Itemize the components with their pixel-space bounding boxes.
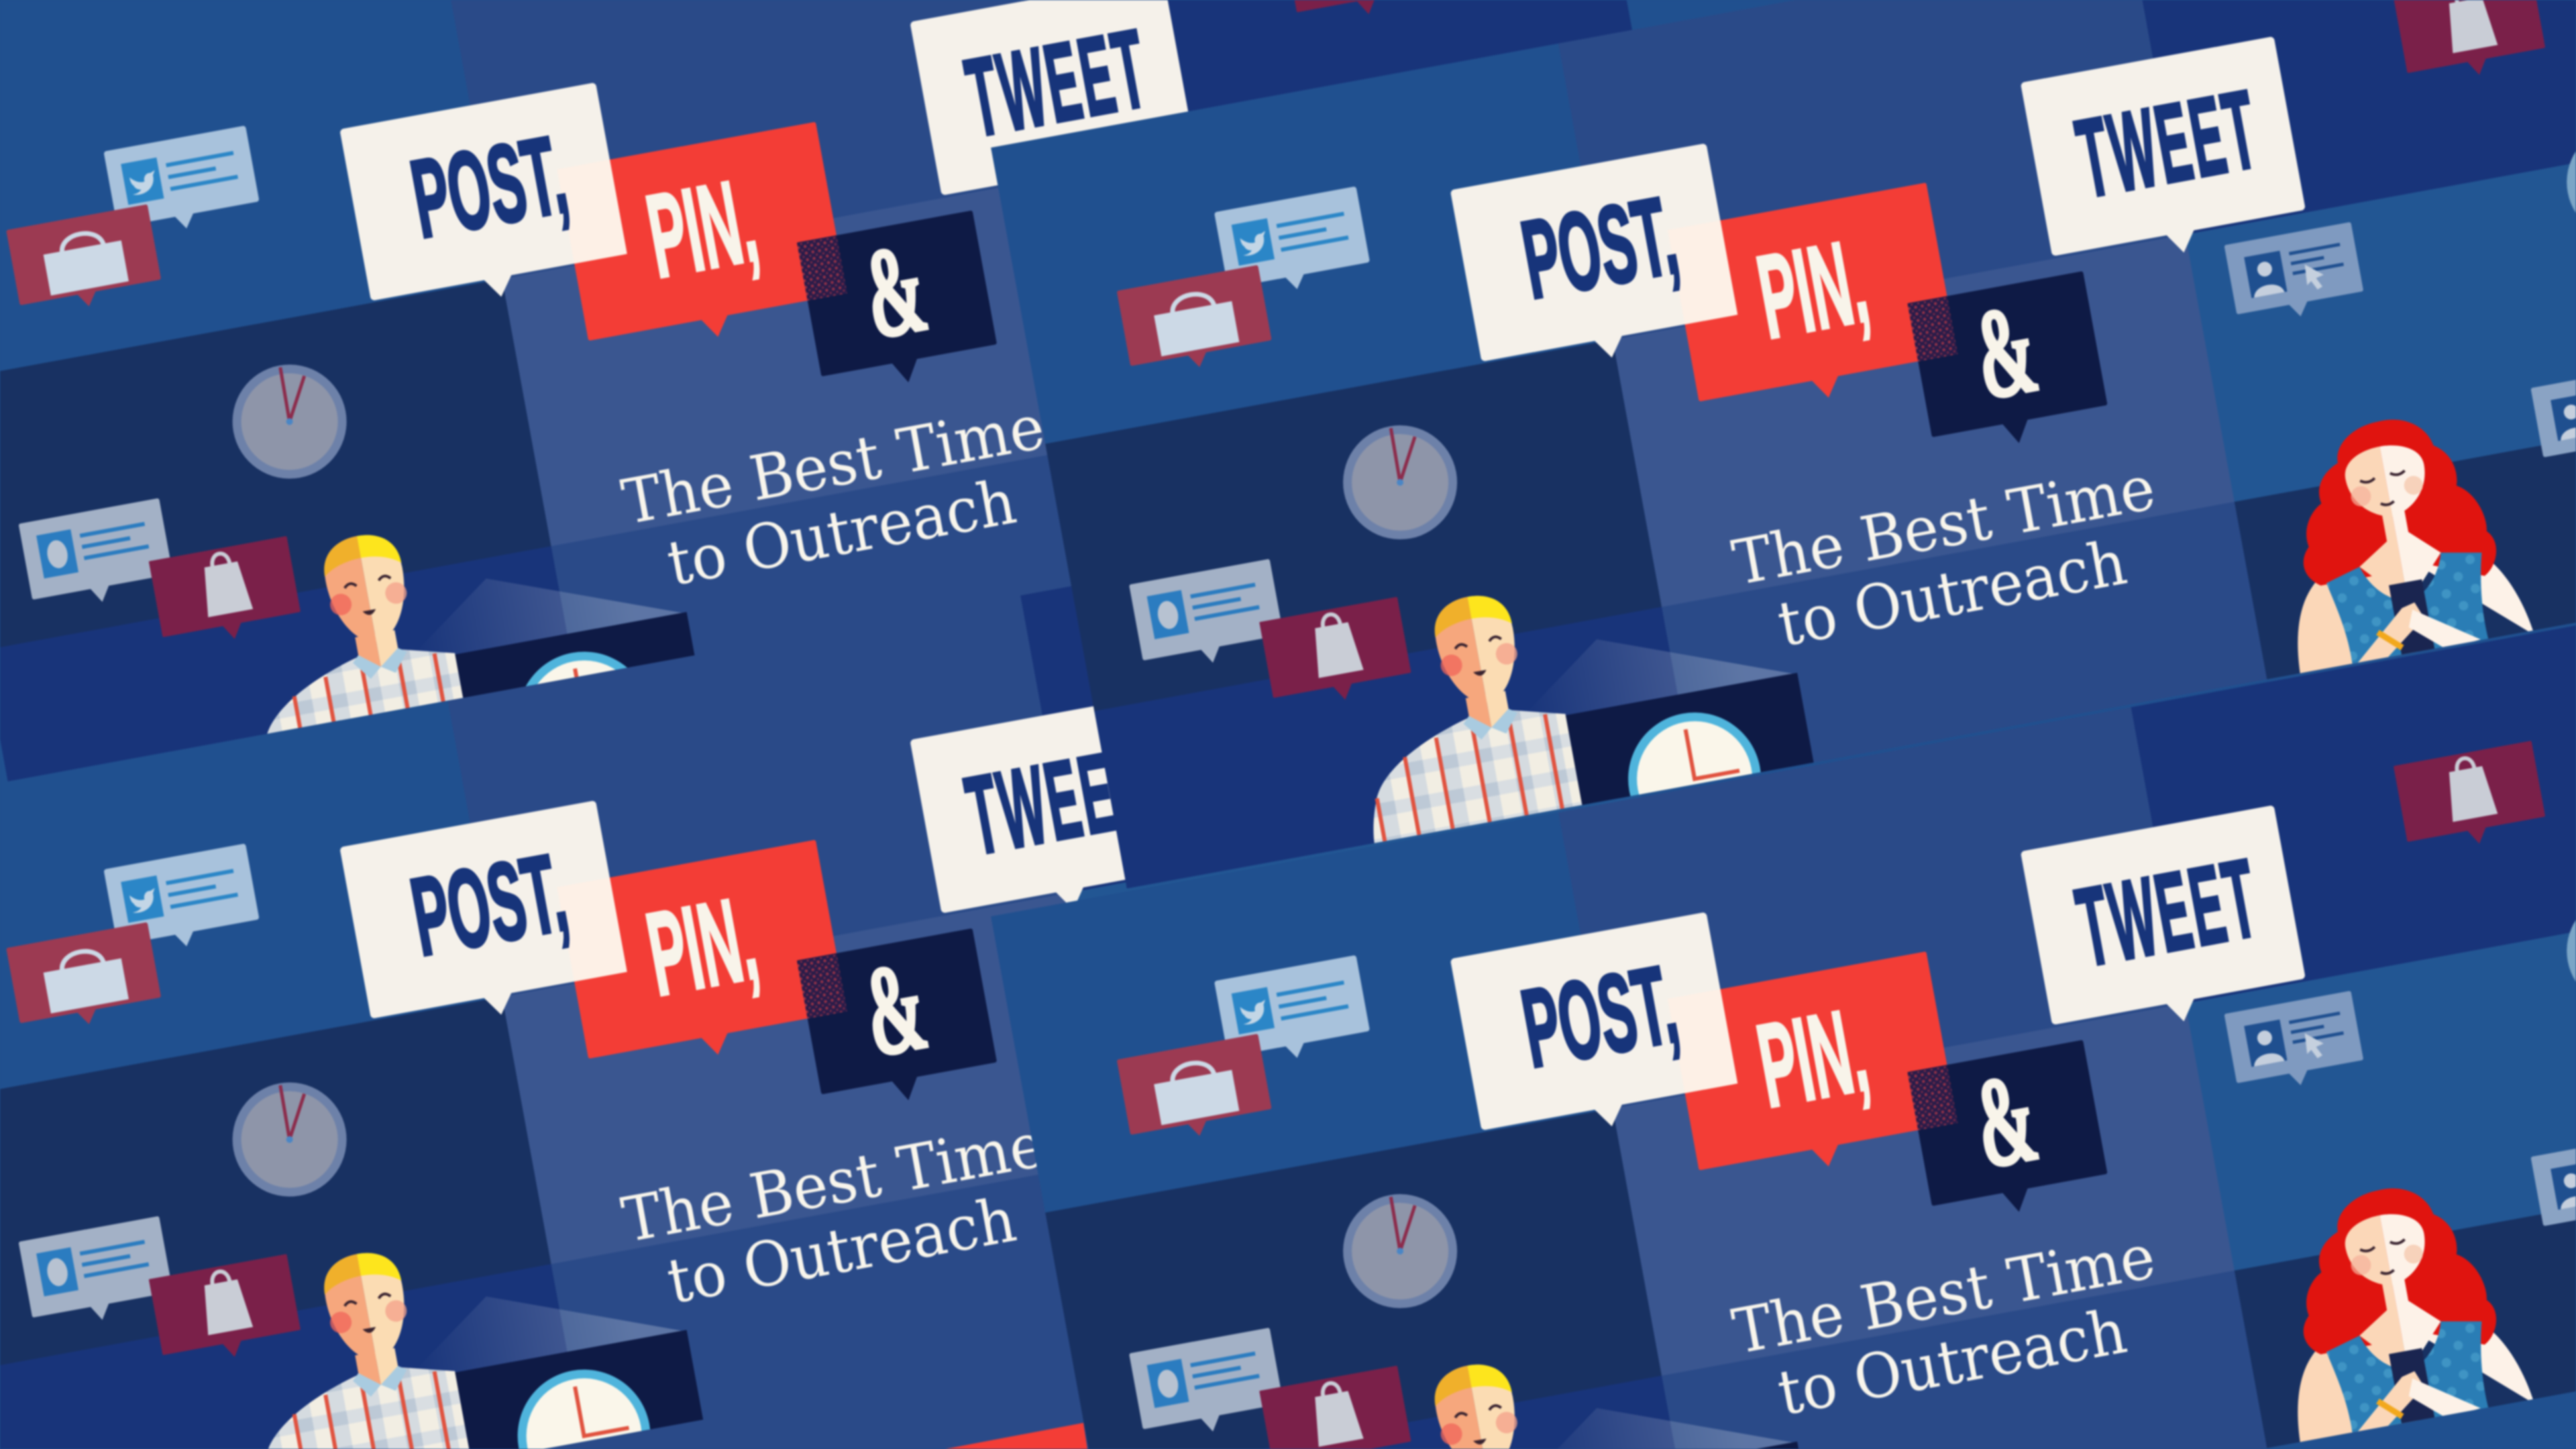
illustration: man and clock — [1334, 1309, 1825, 1449]
speech bubble: ampersand — [1907, 266, 2111, 458]
icon: grey clock — [231, 364, 347, 480]
tile: top-right copy — [991, 0, 2576, 949]
speech bubble: post: POST, — [402, 830, 576, 979]
icon: user card with cursor — [2224, 222, 2366, 327]
background panels — [0, 492, 1721, 1449]
title text: to Outreach — [662, 466, 1021, 600]
speech bubble: ampersand — [796, 206, 1001, 398]
icon: light clock at edge — [2557, 884, 2576, 1017]
tile: bottom-right copy — [991, 604, 2576, 1449]
icon: shopping bag bubble — [148, 535, 302, 639]
speech bubble: post — [1450, 912, 1741, 1150]
icon: shopping bag bubble — [1259, 1366, 1414, 1449]
title text — [616, 391, 1062, 606]
speech bubble: pin — [1668, 182, 1961, 421]
speech bubble: tweet — [2021, 36, 2309, 276]
icon: bag bubble upper right — [2394, 0, 2548, 88]
illustration: woman with phone — [2258, 1169, 2534, 1446]
speech bubble: post — [1450, 143, 1741, 381]
title text: The Best Time — [616, 1109, 1050, 1256]
background panels — [991, 604, 2576, 1449]
icon: shopping bag bubble — [1259, 597, 1414, 712]
speech bubble: pin: PIN, — [638, 872, 766, 1021]
icon: egg profile bubble — [18, 1216, 176, 1332]
icon: user card with cursor — [2224, 991, 2366, 1096]
title text: The Best Time — [1727, 1220, 2160, 1368]
speech bubble: ampersand — [1907, 1035, 2111, 1227]
title text — [1727, 1220, 2173, 1436]
speech bubble: pin: PIN, — [1749, 215, 1877, 364]
speech bubble: tweet: TWEET — [958, 724, 1157, 877]
icon: bag bubble upper right — [1283, 0, 1438, 27]
speech bubble: ampersand: & — [854, 934, 936, 1084]
icon: grey clock — [223, 1073, 356, 1206]
speech bubble: tweet — [910, 694, 1199, 933]
tile: top-left copy — [0, 0, 1633, 782]
speech bubble: pin — [1668, 951, 1961, 1189]
tile: bottom-left copy — [0, 492, 1732, 1449]
title text: The Best Time — [1727, 451, 2160, 599]
speech bubble: post — [339, 800, 631, 1038]
speech bubble: tweet: TWEET — [2068, 835, 2267, 989]
icon: second user card — [2530, 1134, 2576, 1239]
icon: second user card — [2530, 365, 2576, 470]
speech bubble: ampersand: & — [854, 217, 936, 366]
background panels — [991, 0, 2576, 890]
icon: maroon bag bubble — [1117, 1034, 1274, 1148]
icon: egg profile bubble — [1129, 1328, 1286, 1444]
speech bubble: ampersand: & — [1965, 278, 2047, 427]
icon: shopping bag bubble — [149, 1254, 303, 1370]
speech bubble: tweet: TWEET — [2068, 66, 2267, 221]
speech bubble: pin — [573, 121, 837, 342]
illustration: woman with phone — [1147, 340, 1424, 617]
illustration: woman with phone — [2258, 400, 2534, 678]
speech bubble: ampersand: & — [1965, 1046, 2047, 1195]
title text — [616, 1109, 1062, 1324]
icon: maroon bag bubble — [6, 922, 164, 1036]
speech bubble: post: POST, — [1513, 173, 1686, 322]
speech bubble: post — [339, 83, 631, 320]
speech bubble: tweet — [910, 0, 1199, 215]
illustration: man and clock — [223, 1198, 714, 1449]
speech bubble: pin — [557, 840, 851, 1078]
icon: twitter bubble — [103, 843, 262, 959]
title text: The Best Time — [616, 391, 1050, 539]
title text: to Outreach — [1772, 527, 2132, 661]
title text: to Outreach — [662, 1183, 1021, 1318]
icon: maroon bag bubble — [1117, 265, 1274, 379]
icon: twitter bubble — [103, 125, 260, 229]
speech bubble: tweet — [2021, 805, 2309, 1045]
red bubble corner at the bottom edge — [945, 1423, 1087, 1449]
speech bubble: post: POST, — [402, 112, 576, 261]
icon: maroon bag bubble — [6, 204, 164, 319]
icon: twitter bubble — [1214, 955, 1373, 1070]
icon: light clock at edge — [2557, 115, 2576, 248]
title text: to Outreach — [1772, 1295, 2132, 1430]
background panels — [0, 0, 1633, 782]
panel: lower band under the bottom-left copy — [470, 1308, 1140, 1449]
speech bubble: pin: PIN, — [1749, 984, 1877, 1132]
icon: egg profile bubble — [17, 497, 171, 602]
speech bubble: post: POST, — [1513, 942, 1686, 1091]
speech bubble: ampersand — [796, 924, 1001, 1116]
illustration: man and clock — [1334, 541, 1825, 903]
icon: bag bubble upper right — [2394, 741, 2548, 857]
illustration: man and clock — [266, 534, 695, 735]
icon: egg profile bubble — [1129, 559, 1286, 675]
title text — [1727, 451, 2173, 667]
icon: twitter bubble — [1214, 186, 1373, 301]
icon: grey clock — [1334, 416, 1466, 549]
speech bubble: pin: PIN, — [638, 154, 766, 303]
icon: grey clock — [1334, 1185, 1466, 1318]
